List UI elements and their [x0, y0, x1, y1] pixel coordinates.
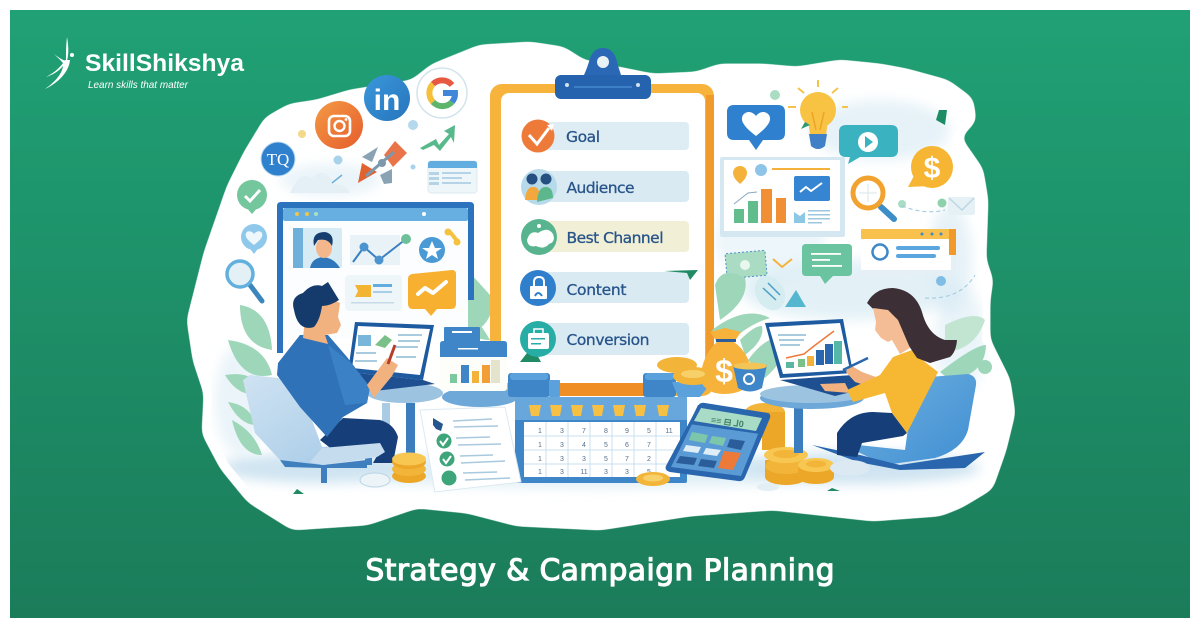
calendar: 5 — [604, 442, 608, 449]
icon: dollar bubble: $ — [924, 152, 941, 185]
icon: instagram — [315, 101, 363, 149]
calendar: 3 — [560, 428, 564, 435]
money bag, cup and coins: $ — [715, 353, 733, 389]
star badge — [419, 228, 460, 263]
teal triangle and note — [749, 270, 806, 316]
calculator — [666, 403, 770, 481]
small ribbon card — [345, 275, 402, 311]
icon: orange magnifier — [853, 178, 894, 219]
title: Strategy & Campaign Planning — [366, 553, 834, 587]
man at desk — [243, 282, 518, 483]
social icons — [227, 68, 477, 301]
icon: heart bubble — [727, 105, 785, 150]
money bag, cup and coins — [657, 328, 767, 394]
calendar: 7 — [582, 428, 586, 435]
hair back — [867, 288, 957, 363]
calendar — [515, 397, 687, 483]
small document card — [428, 161, 477, 193]
calendar: 3 — [560, 469, 564, 476]
icon: teal video bubble — [839, 125, 898, 164]
yellow chart bubble — [408, 270, 456, 316]
line chart — [350, 234, 411, 265]
calendar: 3 — [625, 469, 629, 476]
icon: linkedin — [364, 75, 410, 121]
icon: dollar bubble — [908, 146, 953, 188]
calendar: 4 — [582, 442, 586, 449]
gold coins right — [757, 447, 834, 491]
row: best channel — [521, 219, 689, 255]
soft background tints — [215, 100, 985, 487]
gold coins behind calculator — [745, 403, 785, 450]
calculator: ≡≡ ⊟ ⅃0 — [710, 415, 744, 429]
row: best channel: Best Channel — [566, 229, 664, 247]
face — [873, 308, 910, 354]
icon: heart bubble — [241, 224, 267, 254]
calendar: 5 — [647, 469, 651, 476]
blue boxes — [508, 373, 712, 397]
small decorations — [770, 90, 975, 298]
calendar: 3 — [560, 456, 564, 463]
sweater — [847, 350, 938, 433]
small green ticket — [725, 250, 767, 279]
calendar: 3 — [604, 469, 608, 476]
checklist paper — [420, 407, 521, 492]
white illustration blob — [190, 45, 1012, 527]
row: content — [520, 270, 698, 306]
clipboard clip — [555, 48, 651, 99]
calendar: 7 — [647, 442, 651, 449]
hands and pen — [820, 358, 884, 393]
row: conversion — [520, 321, 689, 362]
pants — [837, 412, 907, 457]
woman at desk — [760, 288, 985, 476]
seat front — [310, 443, 385, 465]
icon: TQ badge — [261, 142, 295, 176]
small foreground details — [293, 488, 840, 494]
arm and hand — [367, 358, 398, 398]
shirt — [277, 335, 370, 437]
green speech bubble — [802, 244, 852, 284]
row: audience: Audience — [566, 179, 634, 197]
calendar: 9 — [625, 428, 629, 435]
chair — [243, 375, 385, 483]
calendar: 5 — [604, 456, 608, 463]
envelope — [948, 197, 975, 215]
blue boxes and calendar — [508, 373, 712, 483]
calendar: 1 — [538, 442, 542, 449]
yellow browser card — [861, 229, 956, 276]
head — [293, 282, 341, 344]
leaves behind man — [225, 275, 492, 455]
leaves right — [712, 273, 992, 380]
calendar: 2 — [647, 456, 651, 463]
icon: google — [417, 68, 467, 118]
clipboard — [490, 48, 714, 396]
calendar: 6 — [625, 442, 629, 449]
tagline: Learn skills that matter — [88, 79, 188, 91]
logo — [45, 37, 244, 91]
calendar: 1 — [538, 456, 542, 463]
calendar: 1 — [538, 428, 542, 435]
row: goal: Goal — [566, 128, 600, 146]
icon: TQ badge: TQ — [267, 150, 289, 169]
row: conversion: Conversion — [566, 331, 650, 349]
brand name: SkillShikshya — [85, 50, 244, 77]
right icons — [720, 80, 975, 316]
icon: check pin — [237, 180, 267, 214]
row: goal — [522, 120, 689, 152]
calendar: 8 — [604, 428, 608, 435]
monitor — [277, 202, 474, 353]
logo mark — [45, 37, 74, 89]
small decorations — [290, 120, 418, 193]
icon: rocket — [358, 141, 407, 184]
calendar: 11 — [665, 428, 673, 435]
clipboard board — [490, 84, 714, 396]
calendar: 7 — [625, 456, 629, 463]
row: audience — [521, 169, 689, 205]
socks — [830, 460, 870, 476]
icon: linkedin: in — [374, 84, 400, 117]
desk — [760, 385, 864, 453]
orange chevron — [773, 259, 792, 267]
calendar: 11 — [580, 469, 588, 476]
row: content: Content — [566, 281, 626, 299]
gold coins left — [360, 452, 670, 487]
icon: green growth arrow — [420, 125, 455, 151]
calendar: 3 — [582, 456, 586, 463]
pants — [320, 418, 398, 463]
dashboard card — [720, 157, 845, 237]
small chart card — [440, 327, 507, 391]
calendar: 1 — [538, 469, 542, 476]
laptop — [765, 319, 875, 396]
chair — [812, 374, 985, 470]
profile card — [293, 228, 342, 268]
desk — [367, 383, 518, 455]
icon: magnifier — [227, 261, 262, 301]
calendar: 5 — [647, 428, 651, 435]
laptop — [348, 322, 435, 391]
icon: light bulb — [788, 80, 848, 149]
calendar: 3 — [560, 442, 564, 449]
